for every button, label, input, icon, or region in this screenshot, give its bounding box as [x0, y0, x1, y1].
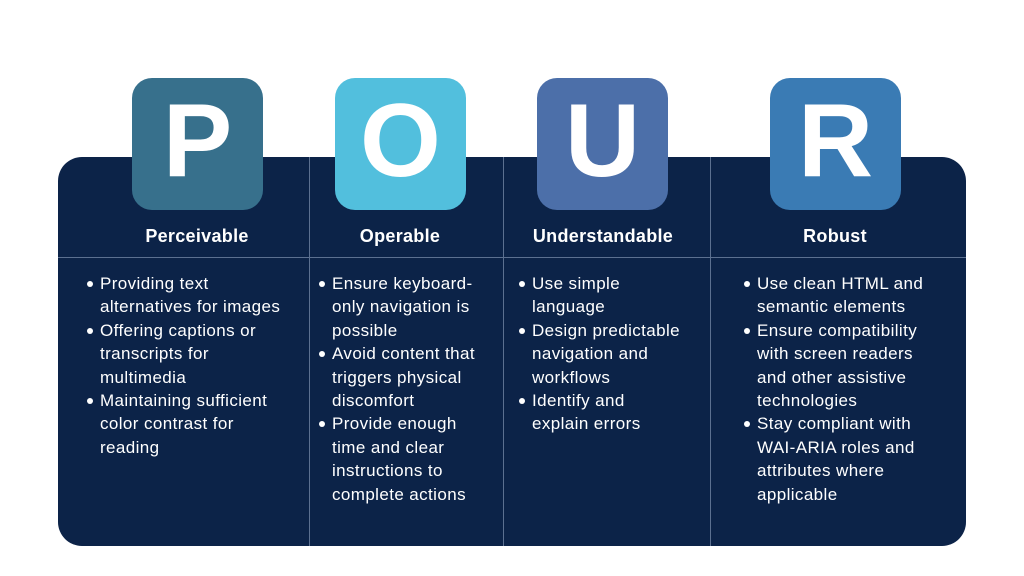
list: operable: instructions to	[332, 461, 443, 480]
list: understandable: Use simple	[532, 274, 620, 293]
list: understandable: language	[532, 297, 605, 316]
list: understandable: Identify and	[532, 391, 625, 410]
heading: Understandable: Understandable	[533, 226, 673, 246]
list: robust: semantic elements	[757, 297, 906, 316]
list: operable: time and clear	[332, 438, 444, 457]
list: operable: complete actions	[332, 485, 466, 504]
tile: O: O	[360, 83, 441, 199]
list: robust: and other assistive	[757, 368, 906, 387]
tile: R	[770, 78, 901, 210]
list: robust: technologies	[757, 391, 857, 410]
list: operable: triggers physical	[332, 368, 462, 387]
heading: Robust: Robust	[803, 226, 867, 246]
list: understandable: navigation and	[532, 344, 648, 363]
list: robust: applicable	[757, 485, 838, 504]
list: robust: with screen readers	[757, 344, 913, 363]
list: robust: WAI-ARIA roles and	[757, 438, 915, 457]
list: perceivable: Offering captions or	[100, 321, 256, 340]
list: robust: Ensure compatibility	[757, 321, 917, 340]
heading: Perceivable: Perceivable	[145, 226, 249, 246]
heading: Operable: Operable	[360, 226, 440, 246]
list: operable: possible	[332, 321, 398, 340]
list: perceivable: Maintaining sufficient	[100, 391, 267, 410]
list: robust: Use clean HTML and	[757, 274, 923, 293]
tile: U	[537, 78, 668, 210]
list: perceivable: Providing text	[100, 274, 209, 293]
list: robust: attributes where	[757, 461, 884, 480]
list: understandable: explain errors	[532, 414, 641, 433]
list: robust	[744, 274, 923, 504]
list: operable: only navigation is	[332, 297, 470, 316]
list: operable: Provide enough	[332, 414, 457, 433]
tile: P	[132, 78, 263, 210]
panel: dark background	[58, 157, 966, 546]
list: perceivable: reading	[100, 438, 160, 457]
list: perceivable: transcripts for	[100, 344, 209, 363]
list: understandable	[519, 274, 680, 433]
list: understandable: workflows	[532, 368, 610, 387]
list: understandable: Design predictable	[532, 321, 680, 340]
tile: R: R	[798, 83, 873, 199]
list: perceivable	[87, 274, 280, 457]
list: operable: Avoid content that	[332, 344, 475, 363]
tile: P: P	[163, 83, 232, 199]
list: operable: discomfort	[332, 391, 414, 410]
list: perceivable: color contrast for	[100, 414, 234, 433]
tile: O	[335, 78, 466, 210]
list: perceivable: alternatives for images	[100, 297, 280, 316]
list: operable	[319, 274, 475, 504]
list: perceivable: multimedia	[100, 368, 186, 387]
tile: U: U	[565, 83, 640, 199]
list: robust: Stay compliant with	[757, 414, 911, 433]
list: operable: Ensure keyboard-	[332, 274, 473, 293]
